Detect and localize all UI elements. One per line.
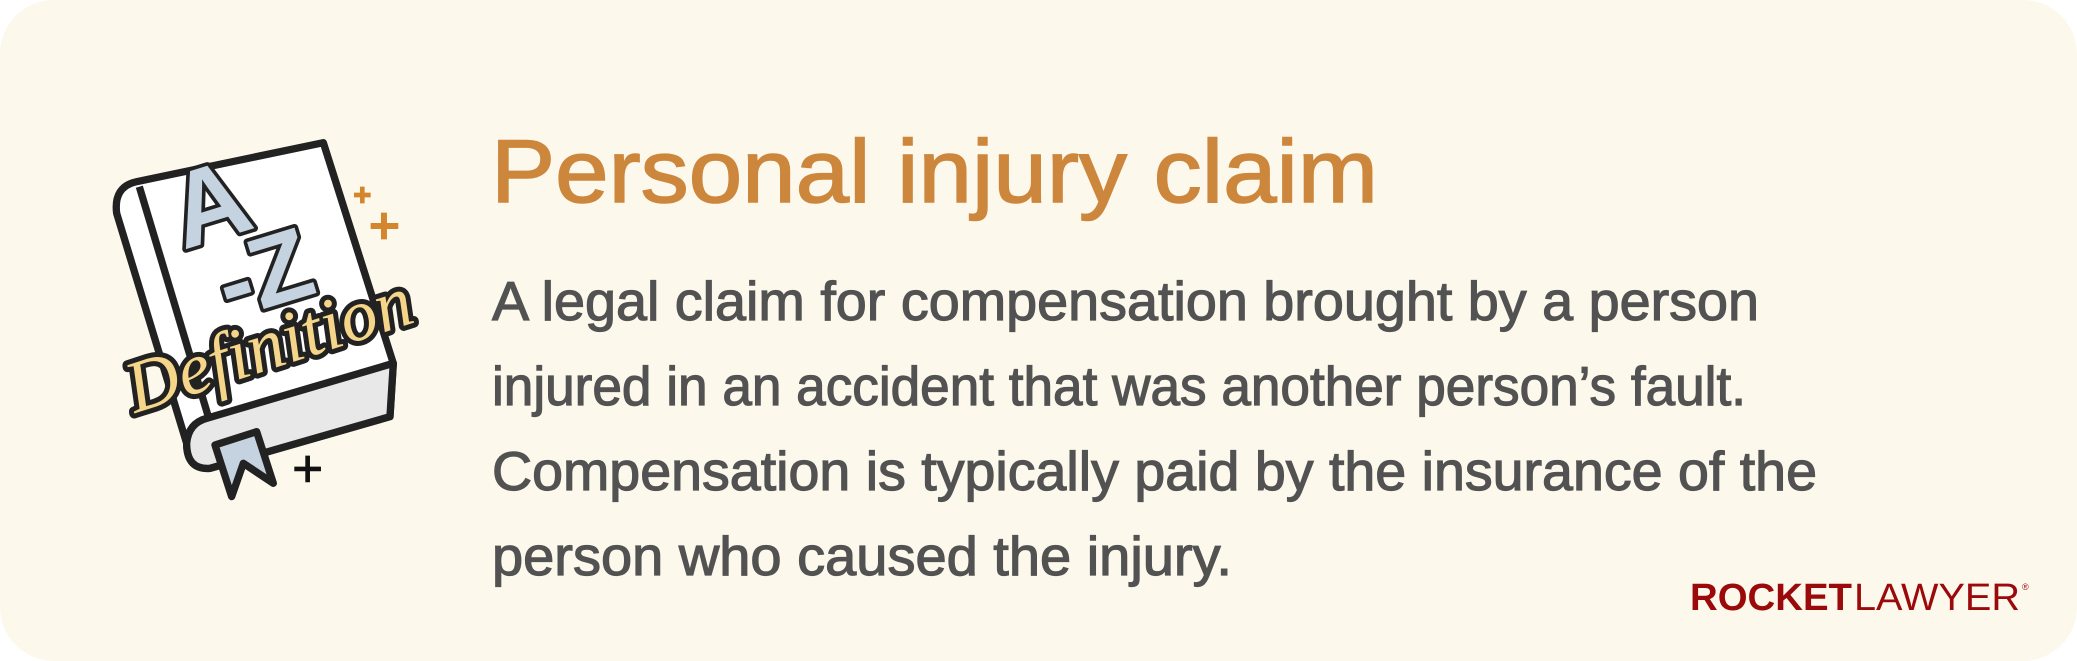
body text: person who caused the injury. bbox=[492, 525, 1232, 587]
letters A-Z: A bbox=[155, 135, 264, 272]
icon: A-Z definition book bbox=[114, 123, 422, 497]
logo: Rocket Lawyer: LAWYER bbox=[1854, 577, 2020, 619]
logo: Rocket Lawyer: ROCKET bbox=[1690, 577, 1852, 619]
logo: Rocket Lawyer bbox=[1690, 577, 2029, 619]
book body bbox=[116, 143, 393, 468]
sparkles bbox=[354, 187, 371, 203]
body text: Compensation is typically paid by the insurance of the bbox=[492, 440, 1817, 502]
book pages bbox=[187, 363, 393, 468]
title: Personal injury claim bbox=[491, 121, 1378, 221]
letters A-Z: -Z bbox=[203, 206, 326, 341]
logo: Rocket Lawyer: ® bbox=[2022, 582, 2029, 592]
body text bbox=[492, 270, 1817, 587]
body text: A legal claim for compensation brought by a person bbox=[492, 270, 1759, 332]
letters A-Z bbox=[155, 123, 326, 347]
body text: injured in an accident that was another person’s fault. bbox=[492, 355, 1746, 417]
bookmark bbox=[215, 432, 273, 497]
script word Definition: Definition bbox=[114, 260, 422, 429]
